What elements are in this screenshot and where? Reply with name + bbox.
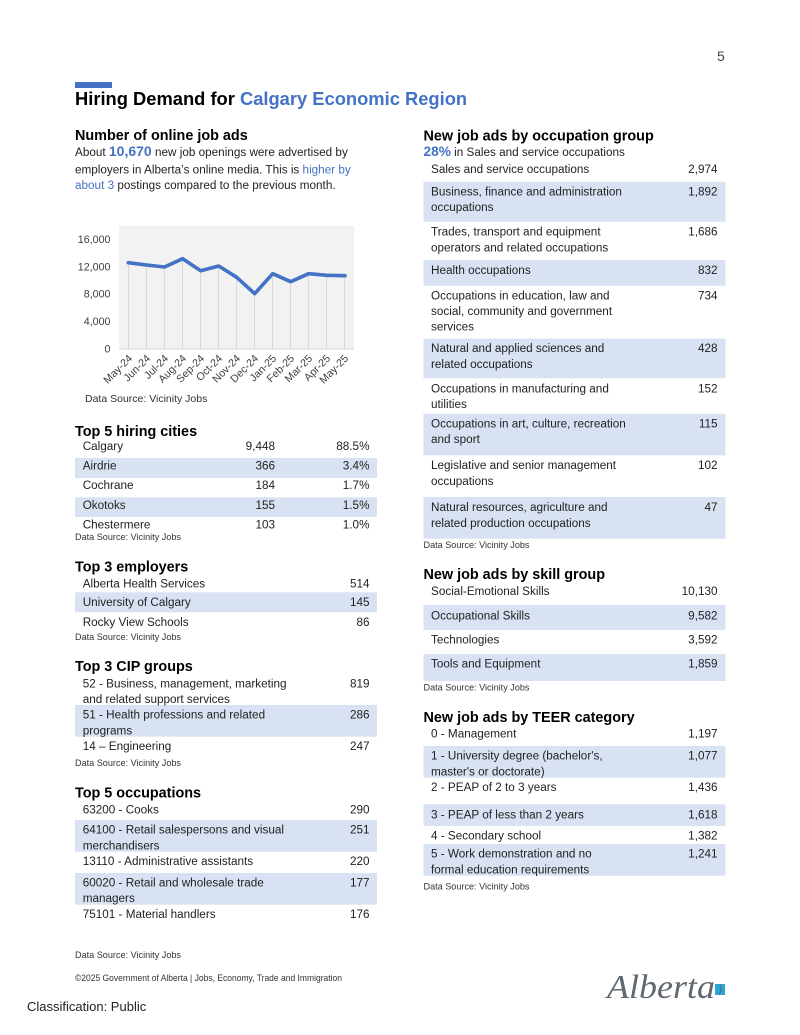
- table: employers: Rocky View Schools: [83, 616, 189, 629]
- table: occupation groups: Occupations in education, law and: [431, 289, 610, 302]
- table: CIP groups: 819: [350, 678, 370, 690]
- table: employers: Alberta Health Services: [83, 578, 205, 590]
- table: hiring cities: 184: [255, 479, 275, 492]
- x axis labels: Nov-24: [210, 353, 243, 385]
- panel: top 3 employers: [75, 560, 377, 642]
- table: TEER categories: 0 - Management: [431, 728, 517, 741]
- table: occupation groups: 152: [698, 382, 718, 396]
- panel: new job ads by occupation group: [424, 128, 726, 550]
- table: employers: University of Calgary: [83, 596, 191, 609]
- table: occupations: 64100 - Retail salespersons and visual: [83, 824, 284, 837]
- title: Hiring Demand for Calgary Economic Region: [75, 88, 467, 109]
- intro paragraph: employers in Alberta’s online media. This is higher by: [75, 164, 351, 176]
- table: occupation groups: 115: [699, 418, 718, 430]
- table: hiring cities: 88.5%: [336, 440, 370, 453]
- table: occupation groups: services: [431, 320, 474, 334]
- table: occupation groups: utilities: [431, 398, 467, 411]
- source note: Data Source: Vicinity Jobs: [75, 532, 181, 542]
- y axis labels: 4,000: [84, 316, 111, 328]
- y axis labels: 8,000: [84, 289, 111, 301]
- table: occupation groups: 1,892: [688, 186, 718, 198]
- table: occupations: 251: [350, 824, 370, 837]
- table: occupation groups: 102: [698, 459, 718, 472]
- source note: Data Source: Vicinity Jobs: [424, 682, 530, 692]
- table: occupation groups: 832: [698, 264, 718, 277]
- table: occupation groups: 734: [698, 289, 718, 302]
- table: TEER categories: 2 - PEAP of 2 to 3 years: [431, 781, 557, 794]
- table: occupation groups: social, community and government: [431, 305, 613, 318]
- y axis labels: 16,000: [78, 234, 111, 246]
- heading: top 5 hiring cities: Top 5 hiring cities: [75, 424, 197, 440]
- table: occupation groups: 47: [704, 501, 718, 514]
- logo: Alberta: Alberta: [605, 969, 715, 1006]
- table: occupations: managers: [83, 892, 135, 905]
- intro paragraph: [75, 143, 351, 192]
- table: hiring cities: 366: [255, 460, 275, 472]
- table: TEER categories: 1,241: [688, 848, 718, 861]
- table: hiring cities: [75, 440, 377, 532]
- table: CIP groups: [75, 678, 377, 753]
- table: occupation groups: Trades, transport and equipment: [431, 226, 601, 238]
- table: TEER categories: 1,618: [688, 808, 718, 822]
- table: TEER categories: 5 - Work demonstration and no: [431, 848, 592, 861]
- table: TEER categories: formal education requirements: [431, 864, 589, 876]
- y axis labels: 0: [105, 344, 111, 356]
- intro paragraph: about 3 postings compared to the previous month.: [75, 179, 336, 192]
- highlight statement: 28% in Sales and service occupations: [424, 144, 625, 159]
- table: CIP groups: 286: [350, 709, 370, 722]
- table: occupations: 13110 - Administrative assistants: [83, 855, 253, 868]
- table: TEER categories: master's or doctorate): [431, 766, 545, 778]
- table: hiring cities: 155: [255, 499, 275, 512]
- table: occupation groups: operators and related occupations: [431, 242, 608, 254]
- heading: top 5 occupations: Top 5 occupations: [75, 786, 201, 802]
- x axis labels: Apr-25: [302, 353, 333, 384]
- table: CIP groups: 247: [350, 740, 370, 753]
- table: employers: 145: [350, 596, 370, 609]
- table: occupation groups: Occupations in art, culture, recreation: [431, 418, 626, 430]
- panel: new job ads by TEER category: [424, 710, 726, 892]
- panel: top 5 occupations: [75, 786, 377, 960]
- x axis labels: Jan-25: [248, 353, 279, 384]
- table: skill groups: 9,582: [688, 609, 718, 622]
- source note: Data Source: Vicinity Jobs: [75, 758, 181, 768]
- title accent bar: [75, 82, 112, 88]
- table: occupation groups: Occupations in manufacturing and: [431, 382, 609, 396]
- table: skill groups: 3,592: [688, 634, 718, 646]
- table: occupations: 63200 - Cooks: [83, 804, 159, 816]
- table: occupation groups: Natural resources, agriculture and: [431, 501, 608, 514]
- page number: 5: [717, 48, 725, 64]
- chart source note: Data Source: Vicinity Jobs: [85, 393, 207, 405]
- table: occupations: 176: [350, 908, 370, 921]
- data line: [128, 259, 345, 294]
- heading: occupation group: New job ads by occupation group: [424, 128, 654, 144]
- heading: number of online job ads: Number of online job ads: [75, 128, 248, 144]
- table: TEER categories: 1 - University degree (bachelor's,: [431, 750, 603, 762]
- source note: Data Source: Vicinity Jobs: [424, 882, 530, 892]
- x axis labels: May-25: [317, 353, 351, 386]
- heading: top 3 employers: Top 3 employers: [75, 560, 188, 576]
- panel: top 3 CIP groups: [75, 659, 377, 768]
- table: occupation groups: and sport: [431, 433, 481, 446]
- table: occupations: [75, 804, 377, 921]
- x axis labels: Sep-24: [174, 353, 207, 385]
- heading: skill group: New job ads by skill group: [424, 567, 605, 583]
- table: hiring cities: 1.0%: [343, 519, 370, 532]
- y axis labels: 12,000: [78, 261, 111, 273]
- x axis labels: Aug-24: [156, 353, 189, 385]
- table: skill groups: Tools and Equipment: [431, 658, 541, 671]
- table: occupation groups: Natural and applied sciences and: [431, 342, 604, 355]
- x axis labels: Jun-24: [122, 353, 153, 384]
- table: hiring cities: 1.7%: [343, 479, 370, 492]
- table: occupations: 60020 - Retail and wholesale trade: [83, 876, 264, 890]
- line chart: online job ads by month: [78, 226, 354, 386]
- classification label: Classification: Public: [27, 999, 147, 1014]
- table: skill groups: [424, 585, 726, 681]
- table: occupation groups: 428: [698, 342, 718, 355]
- table: hiring cities: 103: [255, 519, 275, 532]
- source note: Data Source: Vicinity Jobs: [75, 950, 181, 960]
- x axis labels: May-24: [101, 353, 135, 386]
- table: skill groups: Technologies: [431, 634, 500, 646]
- table: hiring cities: 1.5%: [343, 499, 370, 512]
- table: CIP groups: and related support services: [83, 693, 230, 706]
- x axis labels: Jul-24: [142, 353, 171, 382]
- panel: number of online job ads: [75, 128, 354, 405]
- table: occupation groups: related production occupations: [431, 517, 591, 530]
- table: hiring cities: Cochrane: [83, 479, 134, 492]
- y axis labels: [78, 234, 111, 356]
- table: occupations: 177: [350, 876, 370, 890]
- table: skill groups: 1,859: [688, 658, 718, 671]
- table: occupation groups: occupations: [431, 201, 494, 214]
- table: hiring cities: Okotoks: [83, 499, 126, 512]
- table: occupation groups: Health occupations: [431, 264, 531, 277]
- table: employers: [75, 578, 377, 629]
- table: skill groups: Social-Emotional Skills: [431, 585, 550, 598]
- x axis labels: Mar-25: [283, 353, 315, 385]
- table: employers: 86: [356, 616, 370, 629]
- table: TEER categories: 3 - PEAP of less than 2 years: [431, 808, 584, 822]
- source note: Data Source: Vicinity Jobs: [75, 632, 181, 642]
- table: occupation groups: Business, finance and administration: [431, 186, 622, 198]
- table: TEER categories: 1,077: [688, 750, 718, 762]
- x axis labels: Feb-25: [265, 353, 297, 385]
- table: CIP groups: 14 – Engineering: [83, 740, 171, 753]
- table: occupation groups: Sales and service occupations: [431, 163, 589, 176]
- table: occupations: merchandisers: [83, 840, 160, 852]
- table: TEER categories: 1,382: [688, 830, 718, 842]
- table: occupation groups: occupations: [431, 475, 494, 488]
- copyright footer: ©2025 Government of Alberta | Jobs, Economy, Trade and Immigration: [75, 973, 342, 984]
- table: hiring cities: Airdrie: [83, 460, 117, 472]
- intro paragraph: About 10,670 new job openings were advertised by: [75, 143, 348, 159]
- x axis labels: Dec-24: [228, 353, 261, 385]
- table: TEER categories: 4 - Secondary school: [431, 830, 541, 842]
- table: hiring cities: 3.4%: [343, 460, 370, 472]
- table: occupations: 220: [350, 855, 370, 868]
- table: CIP groups: 51 - Health professions and related: [83, 709, 265, 722]
- table: CIP groups: 52 - Business, management, marketing: [83, 678, 287, 690]
- table: hiring cities: 9,448: [246, 440, 275, 453]
- table: occupation groups: related occupations: [431, 358, 533, 371]
- table: TEER categories: 1,197: [688, 728, 718, 741]
- table: skill groups: 10,130: [682, 585, 718, 598]
- table: occupation groups: [424, 163, 726, 539]
- heading: TEER category: New job ads by TEER category: [424, 710, 635, 726]
- table: occupations: 290: [350, 804, 370, 816]
- heading: top 3 CIP groups: Top 3 CIP groups: [75, 659, 193, 675]
- x axis labels: Oct-24: [194, 353, 225, 384]
- table: TEER categories: [424, 728, 726, 876]
- panel: new job ads by skill group: [424, 567, 726, 692]
- table: occupation groups: 2,974: [688, 163, 718, 176]
- x axis labels: [101, 353, 351, 386]
- table: skill groups: Occupational Skills: [431, 609, 530, 622]
- table: occupation groups: Legislative and senior management: [431, 459, 617, 472]
- table: CIP groups: programs: [83, 724, 132, 738]
- source note: Data Source: Vicinity Jobs: [424, 540, 530, 550]
- table: occupations: 75101 - Material handlers: [83, 908, 216, 921]
- table: TEER categories: 1,436: [688, 781, 718, 794]
- table: hiring cities: Calgary: [83, 440, 123, 453]
- panel: top 5 hiring cities: [75, 424, 377, 542]
- table: occupation groups: 1,686: [688, 226, 718, 238]
- table: hiring cities: Chestermere: [83, 519, 150, 532]
- table: employers: 514: [350, 578, 370, 590]
